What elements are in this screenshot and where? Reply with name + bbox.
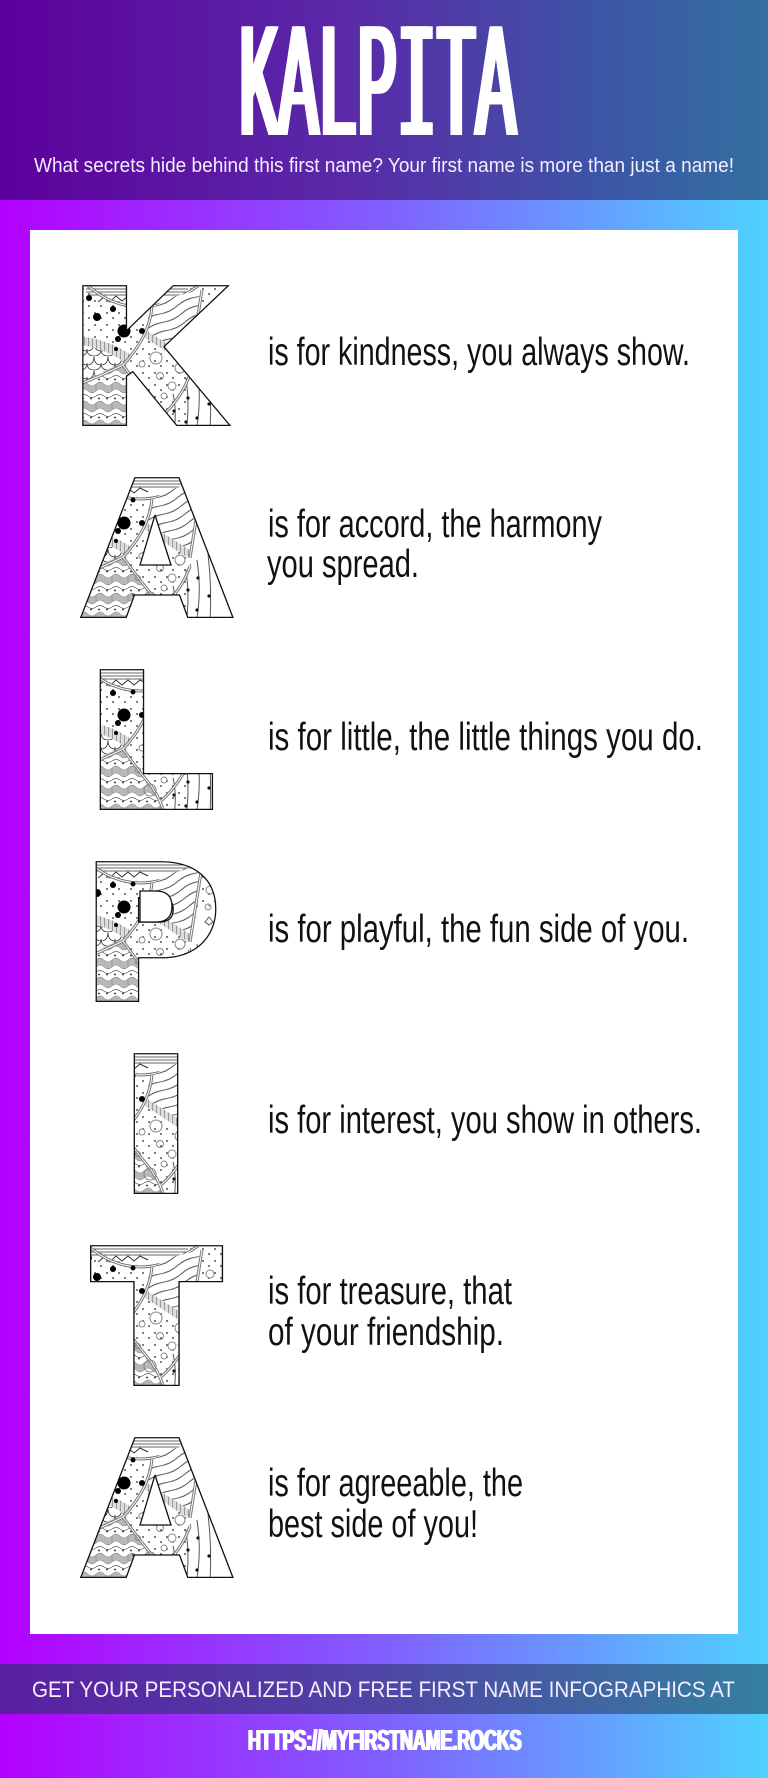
text: T lines: is for treasure, that [268,1270,512,1313]
letter T: T [97,1216,216,1416]
letter A: A [88,448,226,648]
title: KALPITA [239,0,516,185]
letter K: K [78,256,214,456]
footer band [0,1664,768,1714]
row: T [97,1216,216,1416]
row: A [88,448,226,648]
second A notch top edge [132,1554,180,1556]
A counter [140,515,171,565]
text: A lines: is for accord, the harmony [268,503,603,546]
letter I: I [130,1024,182,1224]
second A notch infill [130,1542,183,1555]
footer url: HTTPS://MYFIRSTNAME.ROCKS [248,1725,522,1757]
text: A lines [267,503,603,586]
letter A second: A [88,1408,226,1608]
letter T: T [97,1216,216,1416]
letter L: L [96,640,210,840]
row: A second [88,1408,226,1608]
letter P: P [92,832,214,1032]
letter I: I [130,1024,182,1224]
letter L: L [96,640,210,840]
text: second A lines: is for agreeable, the [268,1462,523,1505]
letter P: P [92,832,214,1032]
second A counter [140,1475,171,1525]
row: K [78,256,214,456]
row: L [96,640,210,840]
A notch top edge [132,594,180,596]
P counter [140,891,172,922]
header band [0,0,768,200]
row: P [92,832,214,1032]
letter A second: A [88,1408,226,1608]
text: A lines: you spread. [267,543,419,586]
text: T lines [268,1270,512,1354]
text: T lines: of your friendship. [268,1311,504,1354]
subtitle: What secrets hide behind this first name? Your first name is more than just a name! [34,155,734,177]
white panel [30,230,738,1634]
row: I [130,1024,182,1224]
text: second A lines: best side of you! [268,1503,478,1546]
A notch infill [130,582,183,595]
letter A: A [88,448,226,648]
letter K: K [78,256,214,456]
text: second A lines [268,1462,523,1546]
